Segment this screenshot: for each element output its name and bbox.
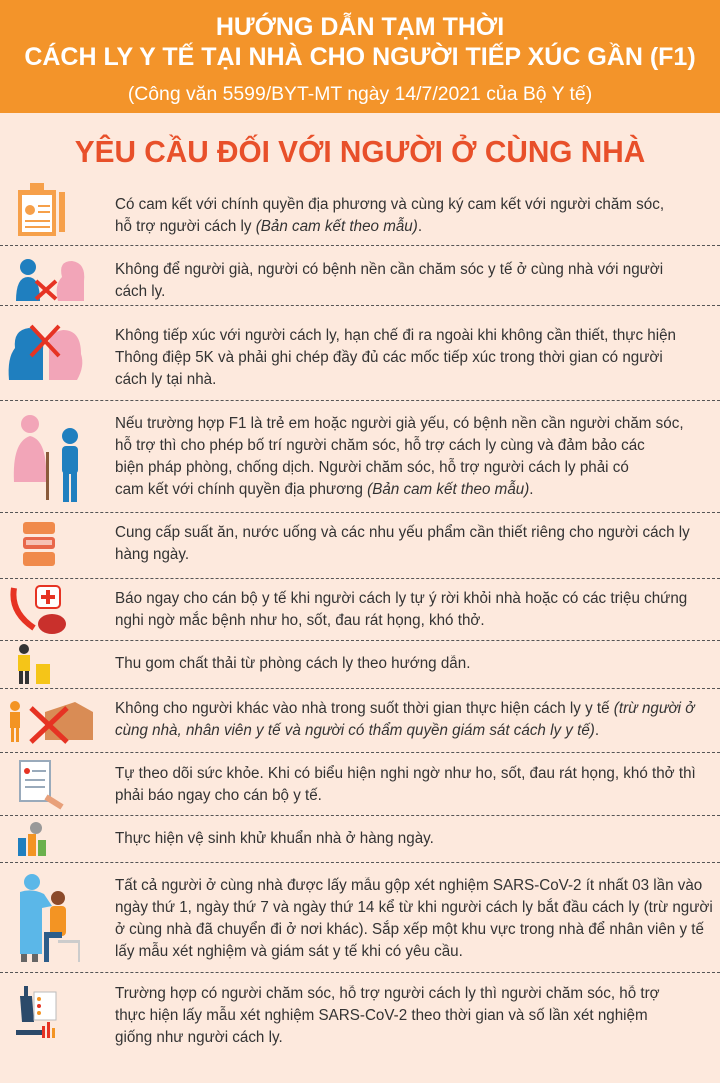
text 10: Thực hiện vệ sinh khử khuẩn nhà ở hàng ngày. [115, 830, 434, 847]
icon: elderly no contact [16, 259, 84, 301]
text 6: nghi ngờ mắc bệnh như ho, sốt, đau rát họng, khó thở. [115, 612, 485, 629]
icon: microscope [16, 986, 56, 1038]
icon: cleaning [18, 822, 46, 856]
icon: testing [20, 874, 80, 962]
icon: document [18, 183, 65, 236]
title [24, 12, 696, 71]
title: HƯỚNG DẪN TẠM THỜI [216, 13, 504, 41]
icon: health checklist [19, 760, 64, 810]
text 4 [115, 415, 684, 498]
text 2: cách ly. [115, 283, 165, 300]
text 12 [115, 985, 660, 1046]
text 11: ở cùng nhà đã chuyển đi ở nơi khác). Sắp xếp một khu vực trong nhà để nhân viên y tế [115, 921, 704, 938]
icon: food boxes [23, 522, 55, 566]
text 8: cùng nhà, nhân viên y tế và người có thẩm quyền giám sát cách ly y tế). [115, 722, 599, 739]
text 4: cam kết với chính quyền địa phương (Bản cam kết theo mẫu). [115, 481, 534, 498]
text 1: Có cam kết với chính quyền địa phương và cùng ký cam kết với người chăm sóc, [115, 196, 664, 213]
text 3 [115, 327, 676, 388]
text 9: Tự theo dõi sức khỏe. Khi có biểu hiện nghi ngờ như ho, sốt, đau rát họng, khó thở thì [115, 765, 696, 782]
text 5: Cung cấp suất ăn, nước uống và các nhu yếu phẩm cần thiết riêng cho người cách ly [115, 524, 690, 541]
subtitle: (Công văn 5599/BYT-MT ngày 14/7/2021 của Bộ Y tế) [128, 84, 592, 105]
text 11: ngày thứ 1, ngày thứ 7 và ngày thứ 14 kể từ khi người cách ly bắt đầu cách ly (trừ người [115, 899, 713, 916]
text 5: hàng ngày. [115, 546, 189, 563]
icon: caregiver and elderly [14, 415, 78, 502]
text 5 [115, 524, 690, 563]
text 1: hỗ trợ người cách ly (Bản cam kết theo mẫu). [115, 218, 422, 235]
header [0, 0, 720, 113]
text 3: Thông điệp 5K và phải ghi chép đầy đủ các mốc tiếp xúc trong thời gian có người [115, 349, 663, 366]
text 4: biện pháp phòng, chống dịch. Người chăm sóc, hỗ trợ người cách ly phải có [115, 459, 629, 476]
text 11: Tất cả người ở cùng nhà được lấy mẫu gộp xét nghiệm SARS-CoV-2 ít nhất 03 lần vào [115, 877, 702, 894]
text 2 [115, 261, 663, 300]
text 12: thực hiện lấy mẫu xét nghiệm SARS-CoV-2 theo thời gian và số lần xét nghiệm [115, 1007, 648, 1024]
text 11 [115, 877, 713, 960]
icon: phone medical [10, 585, 66, 634]
icon: two heads no contact [8, 324, 82, 380]
text 11: lấy mẫu xét nghiệm và giám sát y tế khi có yêu cầu. [115, 943, 463, 960]
text 8 [115, 700, 696, 739]
text 8: Không cho người khác vào nhà trong suốt thời gian thực hiện cách ly y tế (trừ người ở [115, 700, 694, 717]
text 12: giống như người cách ly. [115, 1029, 283, 1046]
text 4: Nếu trường hợp F1 là trẻ em hoặc người già yếu, có bệnh nền cần người chăm sóc, [115, 415, 684, 432]
text 1 [115, 196, 664, 235]
text 9 [115, 765, 696, 804]
text 4: hỗ trợ thì cho phép bố trí người chăm sóc, hỗ trợ cách ly cùng và đảm bảo các [115, 437, 645, 454]
icon: waste collection [18, 644, 50, 684]
icon: no visitors [10, 701, 93, 744]
text 7: Thu gom chất thải từ phòng cách ly theo hướng dẫn. [115, 655, 470, 672]
text 6 [115, 590, 687, 629]
text 3: cách ly tại nhà. [115, 371, 216, 388]
title: CÁCH LY Y TẾ TẠI NHÀ CHO NGƯỜI TIẾP XÚC GẦN (F1) [24, 43, 696, 71]
text 6: Báo ngay cho cán bộ y tế khi người cách ly tự ý rời khỏi nhà hoặc có các triệu chứng [115, 590, 687, 607]
text 9: phải báo ngay cho cán bộ y tế. [115, 787, 322, 804]
section heading: YÊU CẦU ĐỐI VỚI NGƯỜI Ở CÙNG NHÀ [75, 134, 645, 169]
text 3: Không tiếp xúc với người cách ly, hạn chế đi ra ngoài khi không cần thiết, thực hiện [115, 327, 676, 344]
text 2: Không để người già, người có bệnh nền cần chăm sóc y tế ở cùng nhà với người [115, 261, 663, 278]
text 12: Trường hợp có người chăm sóc, hỗ trợ người cách ly thì người chăm sóc, hỗ trợ [115, 985, 660, 1002]
